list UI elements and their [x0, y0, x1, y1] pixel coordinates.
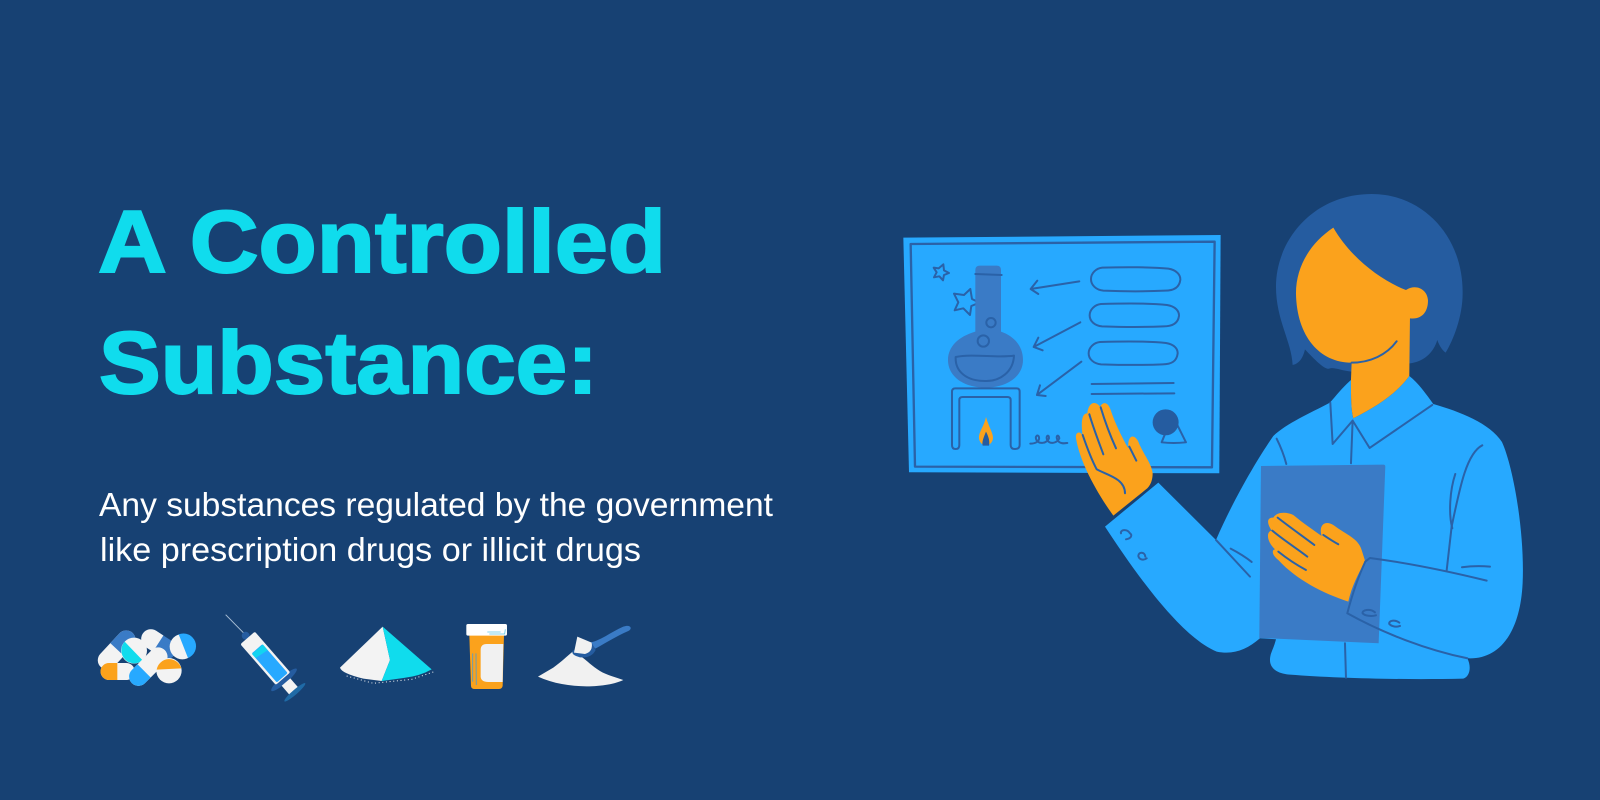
icon: flame	[979, 417, 993, 446]
description text: Any substances regulated by the government	[99, 487, 774, 524]
hair	[1276, 194, 1463, 372]
face and neck	[1296, 228, 1428, 418]
clothing and hand detail lines	[1083, 341, 1490, 678]
icon: burner stand	[952, 388, 1020, 449]
icon: prescription bottle	[466, 624, 507, 689]
title: A Controlled	[98, 192, 666, 291]
label pills	[1089, 267, 1180, 365]
holding hand	[1268, 513, 1365, 602]
title	[98, 192, 666, 412]
shirt	[1105, 376, 1523, 679]
icon: syringe	[226, 615, 309, 705]
icon: powder pile with spoon	[538, 626, 631, 686]
title: Substance:	[99, 313, 598, 412]
icon: flask	[948, 266, 1023, 388]
seal	[1153, 409, 1186, 443]
icon: powder pile	[340, 627, 433, 683]
description text: like prescription drugs or illicit drugs	[100, 532, 641, 569]
raised hand	[1076, 403, 1153, 516]
squiggle	[1030, 435, 1067, 444]
text lines	[1092, 383, 1174, 394]
icon: stars	[934, 264, 979, 315]
description text	[99, 487, 774, 569]
panel: lab diagram board	[903, 235, 1221, 473]
person	[1076, 194, 1523, 679]
icon: pills	[94, 626, 196, 690]
arrows	[1031, 281, 1081, 396]
clipboard	[1259, 465, 1385, 643]
